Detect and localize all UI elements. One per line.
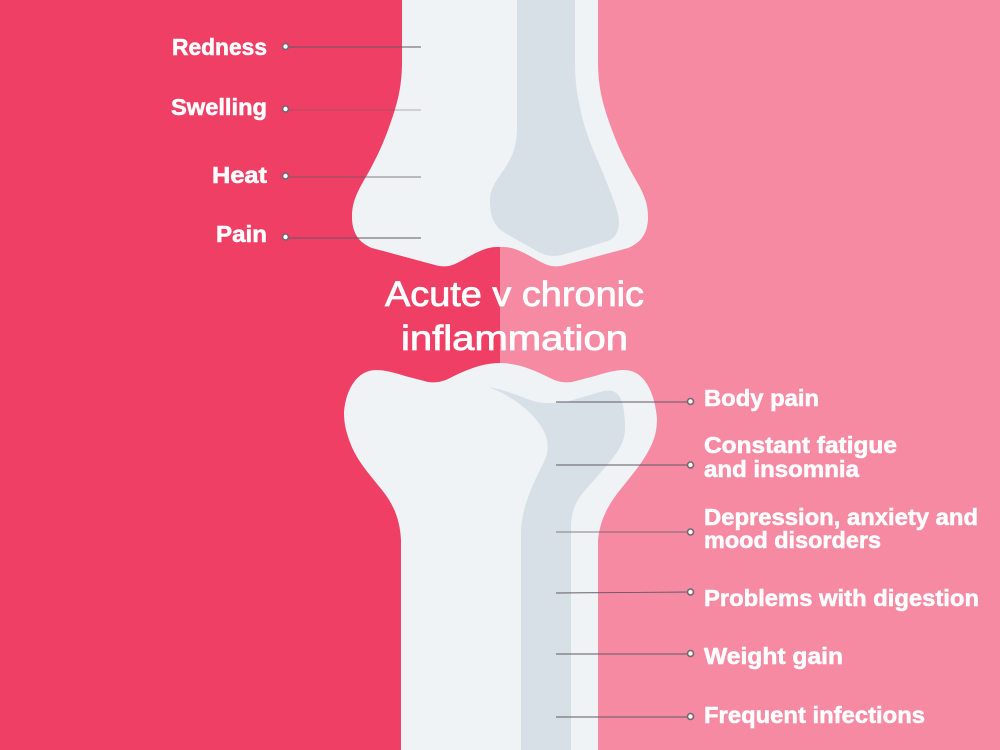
upper bone inner marrow xyxy=(490,0,619,256)
label: Pain xyxy=(216,221,421,247)
label: Constant fatigue and insomnia: and insomnia xyxy=(704,456,859,482)
label: Depression, anxiety and mood disorders xyxy=(556,504,978,553)
chronic symptoms xyxy=(556,385,979,728)
background: chronic half xyxy=(500,0,1000,750)
label: Body pain xyxy=(556,385,819,411)
lower bone xyxy=(344,363,657,750)
label: Redness xyxy=(172,34,421,60)
title: inflammation xyxy=(401,319,628,358)
label: Frequent infections xyxy=(556,702,925,728)
label: Body pain: Body pain xyxy=(704,385,819,411)
label: Swelling xyxy=(171,94,421,120)
label: Depression, anxiety and mood disorders: mood disorders xyxy=(704,527,881,553)
label: Problems with digestion xyxy=(556,585,979,611)
lower bone inner marrow xyxy=(488,387,625,750)
title: Acute v chronic xyxy=(385,275,644,314)
label: Redness: Redness xyxy=(172,34,267,60)
label: Frequent infections: Frequent infections xyxy=(704,702,925,728)
acute symptoms xyxy=(171,34,421,247)
label: Swelling: Swelling xyxy=(171,94,267,120)
upper bone xyxy=(352,0,648,266)
label: Problems with digestion: Problems with digestion xyxy=(704,585,979,611)
upper bone outer shape xyxy=(352,0,648,266)
label: Heat xyxy=(212,162,421,188)
lower bone outer shape xyxy=(344,363,657,750)
label: Constant fatigue and insomnia: Constant fatigue xyxy=(704,432,897,458)
background: acute half xyxy=(0,0,500,750)
label: Depression, anxiety and mood disorders: Depression, anxiety and xyxy=(704,504,978,530)
label: Heat: Heat xyxy=(212,162,267,188)
label: Pain: Pain xyxy=(216,221,267,247)
label: Weight gain: Weight gain xyxy=(704,643,843,669)
title xyxy=(385,275,644,358)
label: Constant fatigue and insomnia xyxy=(556,432,897,482)
label: Weight gain xyxy=(556,643,843,669)
